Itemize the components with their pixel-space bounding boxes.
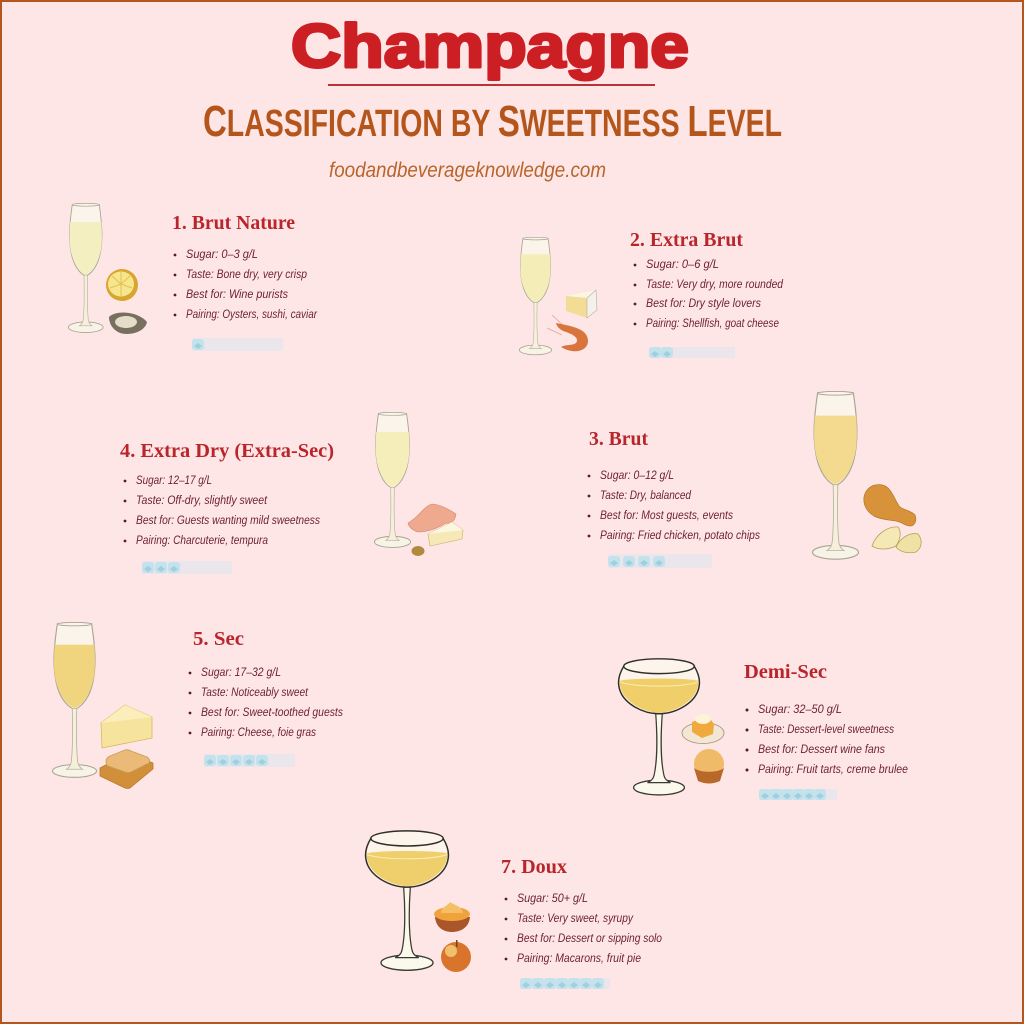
- list: Pairing: Shellfish, goat cheese: [646, 318, 779, 330]
- list: Taste: Very sweet, syrupy: [517, 913, 634, 925]
- list: Sugar: 0–6 g/L: [646, 259, 719, 271]
- sweetness meter: [608, 554, 712, 568]
- panel: 3 Brut: [588, 391, 921, 568]
- list: [588, 470, 760, 542]
- heading: 4. Extra Dry (Extra-Sec): [120, 440, 334, 462]
- icon: fried chicken: [864, 485, 916, 526]
- panel: 1 Brut Nature: [68, 203, 318, 351]
- icon: flute glass: [374, 412, 411, 547]
- panel: 4 Extra Dry: [120, 412, 463, 574]
- sweetness meter: [759, 789, 837, 800]
- list: [174, 249, 318, 321]
- list: Best for: Guests wanting mild sweetness: [136, 515, 320, 527]
- heading: 5. Sec: [193, 628, 244, 650]
- list: Pairing: Fruit tarts, creme brulee: [758, 764, 908, 776]
- icon: lemon: [106, 269, 138, 301]
- list: Sugar: 12–17 g/L: [136, 475, 212, 487]
- list: Best for: Dessert wine fans: [758, 744, 885, 756]
- heading: 1. Brut Nature: [172, 212, 295, 234]
- list: Sugar: 0–12 g/L: [600, 470, 674, 482]
- icon: cheese wedge: [101, 705, 152, 748]
- list: Taste: Very dry, more rounded: [646, 279, 784, 291]
- list: Sugar: 50+ g/L: [517, 893, 588, 905]
- list: Taste: Dessert-level sweetness: [758, 724, 894, 736]
- list: Best for: Dessert or sipping solo: [517, 933, 663, 945]
- icon: apple: [441, 940, 471, 972]
- panel: 7 Doux: [366, 831, 663, 989]
- list: Pairing: Fried chicken, potato chips: [600, 530, 760, 542]
- list: Pairing: Oysters, sushi, caviar: [186, 309, 318, 321]
- heading: 7. Doux: [501, 856, 568, 878]
- icon: cupcake: [434, 902, 470, 932]
- icon: toast with foie gras: [100, 750, 153, 788]
- list: [746, 704, 908, 776]
- icon: flute glass: [519, 237, 552, 355]
- panel: 5 Sec: [52, 622, 343, 788]
- list: Taste: Bone dry, very crisp: [186, 269, 308, 281]
- list: [189, 667, 343, 739]
- icon: flute glass: [68, 203, 103, 333]
- list: Best for: Dry style lovers: [646, 298, 761, 310]
- list: Best for: Sweet-toothed guests: [201, 707, 343, 719]
- list: Sugar: 17–32 g/L: [201, 667, 281, 679]
- panel: 2 Extra Brut: [519, 229, 784, 358]
- icon: potato chips: [872, 527, 921, 553]
- title: Champagne: [291, 12, 689, 80]
- list: Pairing: Macarons, fruit pie: [517, 953, 641, 965]
- list: Taste: Dry, balanced: [600, 490, 692, 502]
- panel: 6 Demi-Sec: [619, 659, 908, 800]
- icon: nuts: [412, 546, 424, 556]
- icon: coupe glass: [366, 831, 448, 970]
- icon: flute glass: [52, 622, 97, 777]
- list: Pairing: Charcuterie, tempura: [136, 535, 268, 547]
- icon: coupe glass: [619, 659, 699, 795]
- heading: Demi-Sec: [744, 661, 827, 683]
- sweetness meter: [520, 978, 610, 989]
- icon: flute glass: [812, 391, 859, 559]
- icon: cheese: [566, 290, 597, 318]
- list: Best for: Wine purists: [186, 289, 288, 301]
- list: [124, 475, 320, 547]
- sweetness meter: [192, 338, 283, 351]
- list: [634, 259, 784, 330]
- list: Sugar: 32–50 g/L: [758, 704, 842, 716]
- heading: 2. Extra Brut: [630, 229, 743, 251]
- icon: oyster: [109, 313, 147, 334]
- list: Taste: Off-dry, slightly sweet: [136, 495, 268, 507]
- icon: shrimp: [547, 315, 588, 351]
- list: Best for: Most guests, events: [600, 510, 733, 522]
- icon: cake on plate: [682, 714, 724, 744]
- website: foodandbeverageknowledge.com: [329, 159, 606, 182]
- list: Sugar: 0–3 g/L: [186, 249, 258, 261]
- list: Pairing: Cheese, foie gras: [201, 727, 316, 739]
- sweetness meter: [204, 754, 295, 767]
- icon: cheese wedge: [428, 522, 463, 546]
- title underline: [328, 84, 655, 86]
- icon: ham slices: [408, 504, 456, 532]
- heading: 3. Brut: [589, 428, 648, 450]
- list: [505, 893, 663, 965]
- sweetness meter: [142, 561, 232, 574]
- sweetness meter: [649, 347, 735, 358]
- subtitle: CLASSIFICATION BY SWEETNESS LEVEL: [203, 97, 782, 146]
- list: Taste: Noticeably sweet: [201, 687, 309, 699]
- icon: tart: [694, 749, 724, 784]
